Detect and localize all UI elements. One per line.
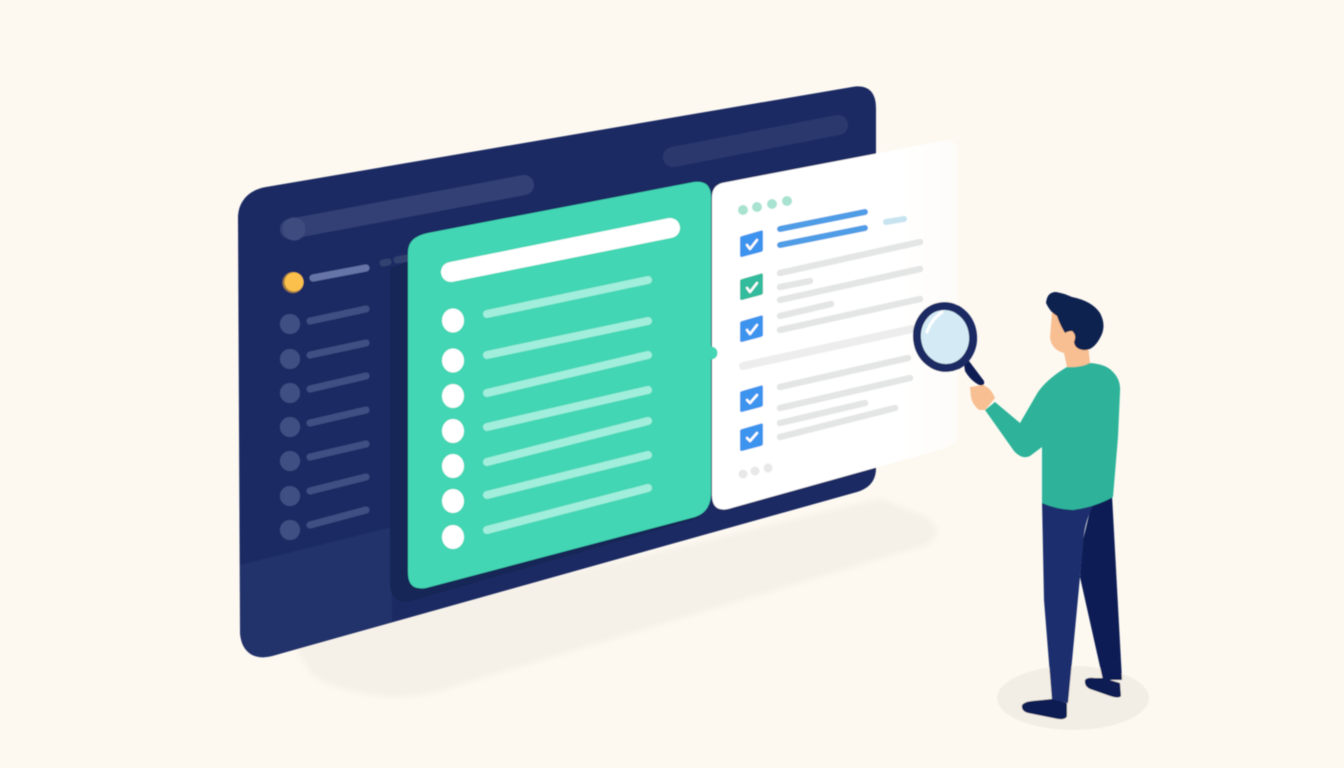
panel: navy screen [238, 86, 876, 657]
back leg [1080, 495, 1122, 680]
footer dots [738, 464, 772, 478]
front shoe [1022, 699, 1067, 719]
hand [970, 385, 995, 410]
list lines [487, 280, 648, 530]
handle [964, 361, 984, 386]
hair [1046, 292, 1104, 350]
checkbox 2 [740, 273, 763, 300]
floor shadow of person [997, 666, 1149, 730]
white card [712, 141, 958, 509]
list bullets [442, 308, 464, 549]
top right bar [673, 125, 838, 157]
grey text lines [780, 242, 920, 437]
green card header bar [451, 228, 670, 272]
person [913, 292, 1122, 719]
back shoe [1085, 678, 1121, 698]
green card [408, 182, 711, 588]
lens glint [927, 312, 942, 332]
dark inset behind green panel [390, 258, 700, 602]
panel: white checklist [712, 141, 958, 509]
screen body [238, 86, 876, 657]
front leg [1042, 500, 1095, 703]
top search bar [282, 185, 524, 240]
checkbox 3 [740, 315, 763, 342]
lens [913, 302, 977, 372]
neck and face [1050, 312, 1090, 367]
floor shadow of screen [290, 498, 938, 698]
sidebar active item [282, 268, 366, 293]
panel: green list [408, 182, 718, 588]
sweater [985, 363, 1120, 510]
checkbox 1 [740, 230, 763, 257]
checkbox 4 [740, 385, 763, 412]
header dots [738, 196, 792, 215]
magnifying glass [913, 302, 984, 386]
light chip [886, 219, 904, 222]
sidebar items [280, 309, 366, 540]
blue heading lines [780, 212, 865, 245]
lighter lower band [240, 527, 392, 657]
divider line [743, 329, 912, 366]
checkbox 5 [740, 423, 763, 451]
small tab marks [383, 258, 408, 263]
connector knob [704, 346, 718, 360]
artwork [238, 86, 1149, 730]
